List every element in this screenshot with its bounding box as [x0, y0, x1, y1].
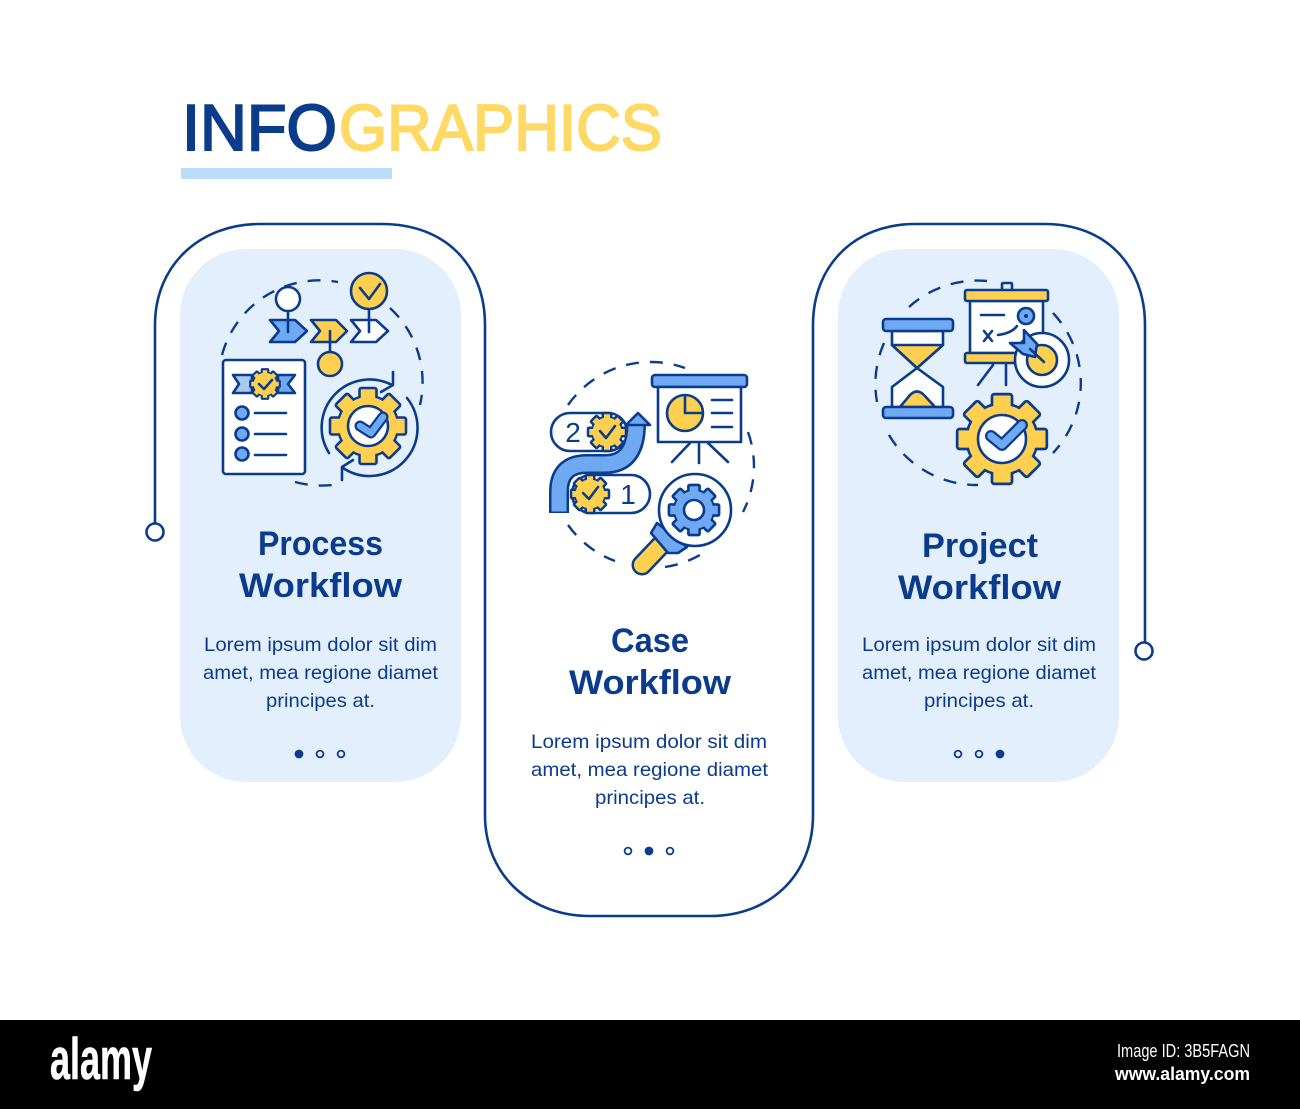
connecting outline — [146, 224, 1152, 916]
title — [182, 91, 662, 164]
title underline — [181, 168, 392, 179]
footer bar: www.alamy.com — [1114, 1064, 1250, 1084]
icon: process workflow — [222, 273, 423, 486]
title: INFO — [182, 91, 337, 164]
text: case description: principes at. — [595, 787, 705, 809]
text: project description: principes at. — [924, 690, 1034, 712]
text: process description: amet, mea regione diamet — [203, 662, 439, 684]
heading: project workflow — [898, 527, 1062, 607]
icon: project workflow — [875, 281, 1081, 485]
text: project description: amet, mea regione diamet — [862, 662, 1097, 684]
pagination dots: case — [625, 847, 673, 855]
pagination dots: project — [955, 750, 1004, 758]
text: case description: Lorem ipsum dolor sit dim — [531, 731, 767, 753]
text: case description — [531, 731, 769, 809]
heading: case workflow — [569, 622, 732, 702]
text: project description: Lorem ipsum dolor sit dim — [862, 634, 1096, 656]
heading: case workflow: Workflow — [569, 664, 732, 702]
heading: project workflow: Project — [922, 527, 1038, 565]
text: process description: Lorem ipsum dolor sit dim — [204, 634, 437, 656]
heading: process workflow: Workflow — [239, 567, 403, 605]
heading: case workflow: Case — [611, 622, 689, 660]
heading: process workflow — [239, 525, 403, 605]
icon: case workflow — [551, 362, 754, 567]
panel: project background — [838, 249, 1119, 782]
panel: process background — [180, 249, 461, 782]
footer bar — [0, 1020, 1300, 1109]
text: process description — [203, 634, 439, 712]
icon: case workflow: 2 — [565, 417, 581, 448]
pagination dots: process — [295, 750, 344, 758]
text: project description — [862, 634, 1097, 712]
icon: case workflow: 1 — [620, 479, 636, 510]
heading: process workflow: Process — [258, 525, 383, 563]
text: process description: principes at. — [266, 690, 375, 712]
title: GRAPHICS — [339, 91, 662, 164]
heading: project workflow: Workflow — [898, 569, 1062, 607]
footer bar: Image ID: 3B5FAGN — [1117, 1041, 1250, 1061]
text: case description: amet, mea regione diamet — [531, 759, 769, 781]
footer bar: alamy — [50, 1027, 152, 1092]
